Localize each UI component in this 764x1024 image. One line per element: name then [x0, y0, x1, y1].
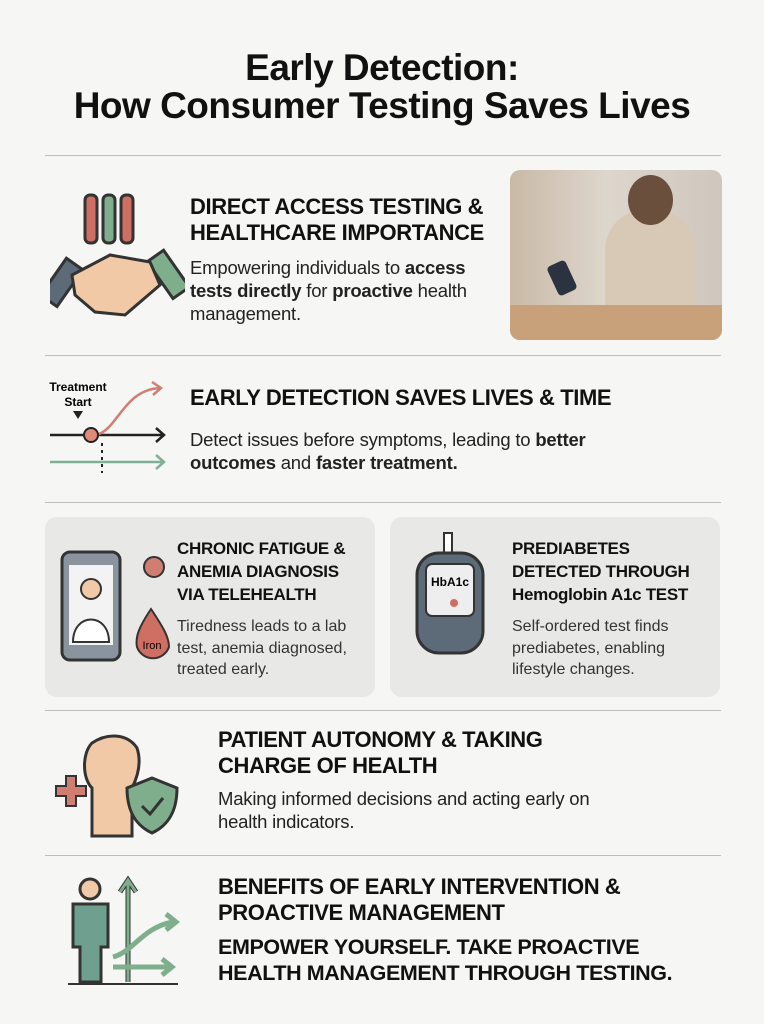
heading: prediabetes: Hemoglobin A1c TEST: [512, 585, 688, 604]
text: direct access: [190, 257, 467, 324]
text: early detection: [190, 429, 586, 473]
text: call to action: HEALTH MANAGEMENT THROUGH TESTING.: [218, 961, 672, 985]
heading: benefits: PROACTIVE MANAGEMENT: [218, 900, 505, 925]
heading: prediabetes: PREDIABETES: [512, 539, 630, 558]
heading: chronic fatigue: VIA TELEHEALTH: [177, 585, 316, 604]
heading: patient autonomy: PATIENT AUTONOMY & TAKING: [218, 727, 542, 752]
icon: glucometer: [416, 532, 484, 654]
title: [74, 47, 690, 126]
card: prediabetes: [390, 517, 720, 697]
text: direct access: management.: [190, 303, 301, 324]
icon: phone doctor and iron drop: [60, 550, 170, 662]
heading: prediabetes: [512, 539, 689, 604]
heading: benefits: [218, 874, 620, 925]
heading: benefits: BENEFITS OF EARLY INTERVENTION &: [218, 874, 620, 899]
text: patient autonomy: Making informed decisions and acting early on: [218, 788, 590, 809]
card: chronic fatigue: [45, 517, 375, 697]
heading: chronic fatigue: [177, 539, 346, 604]
heading: early detection: EARLY DETECTION SAVES LIVES & TIME: [190, 385, 611, 410]
icon: glucometer: HbA1c: [431, 575, 469, 589]
title: Early Detection:: [245, 47, 519, 88]
heading: direct access: [190, 194, 484, 245]
text: call to action: EMPOWER YOURSELF. TAKE PROACTIVE: [218, 935, 639, 959]
icon: timeline arrows: Start: [64, 395, 92, 409]
title: How Consumer Testing Saves Lives: [74, 85, 690, 126]
icon: phone doctor and iron drop: Iron: [143, 640, 161, 652]
heading: chronic fatigue: ANEMIA DIAGNOSIS: [177, 562, 339, 581]
icon: fist, cross and shield: [55, 734, 178, 838]
heading: direct access: HEALTHCARE IMPORTANCE: [190, 220, 484, 245]
text: chronic fatigue: Tiredness leads to a lab: [177, 618, 346, 635]
heading: direct access: DIRECT ACCESS TESTING &: [190, 194, 483, 219]
icon: test tubes and handshake: [50, 194, 185, 316]
heading: patient autonomy: [218, 727, 542, 778]
text: direct access: Empowering individuals to access: [190, 257, 465, 278]
text: chronic fatigue: test, anemia diagnosed,: [177, 640, 347, 656]
text: patient autonomy: [218, 788, 590, 832]
icon: timeline arrows: Treatment: [49, 380, 107, 394]
icon: person with branching arrows: [68, 876, 180, 985]
text: prediabetes: Self-ordered test finds: [512, 618, 669, 635]
text: direct access: tests directly for proactive health: [190, 280, 467, 301]
text: patient autonomy: health indicators.: [218, 811, 354, 832]
text: call to action: [218, 935, 672, 985]
text: prediabetes: prediabetes, enabling: [512, 640, 665, 656]
text: prediabetes: [512, 618, 669, 678]
text: chronic fatigue: treated early.: [177, 661, 269, 678]
photo: woman with glucose meter: [510, 170, 722, 340]
text: early detection: Detect issues before symptoms, leading to better: [190, 429, 586, 450]
text: early detection: outcomes and faster treatment.: [190, 452, 458, 473]
text: chronic fatigue: [177, 618, 347, 678]
icon: timeline arrows: [49, 380, 166, 473]
heading: patient autonomy: CHARGE OF HEALTH: [218, 753, 437, 778]
heading: chronic fatigue: CHRONIC FATIGUE &: [177, 539, 345, 558]
text: prediabetes: lifestyle changes.: [512, 661, 635, 678]
heading: prediabetes: DETECTED THROUGH: [512, 562, 689, 581]
